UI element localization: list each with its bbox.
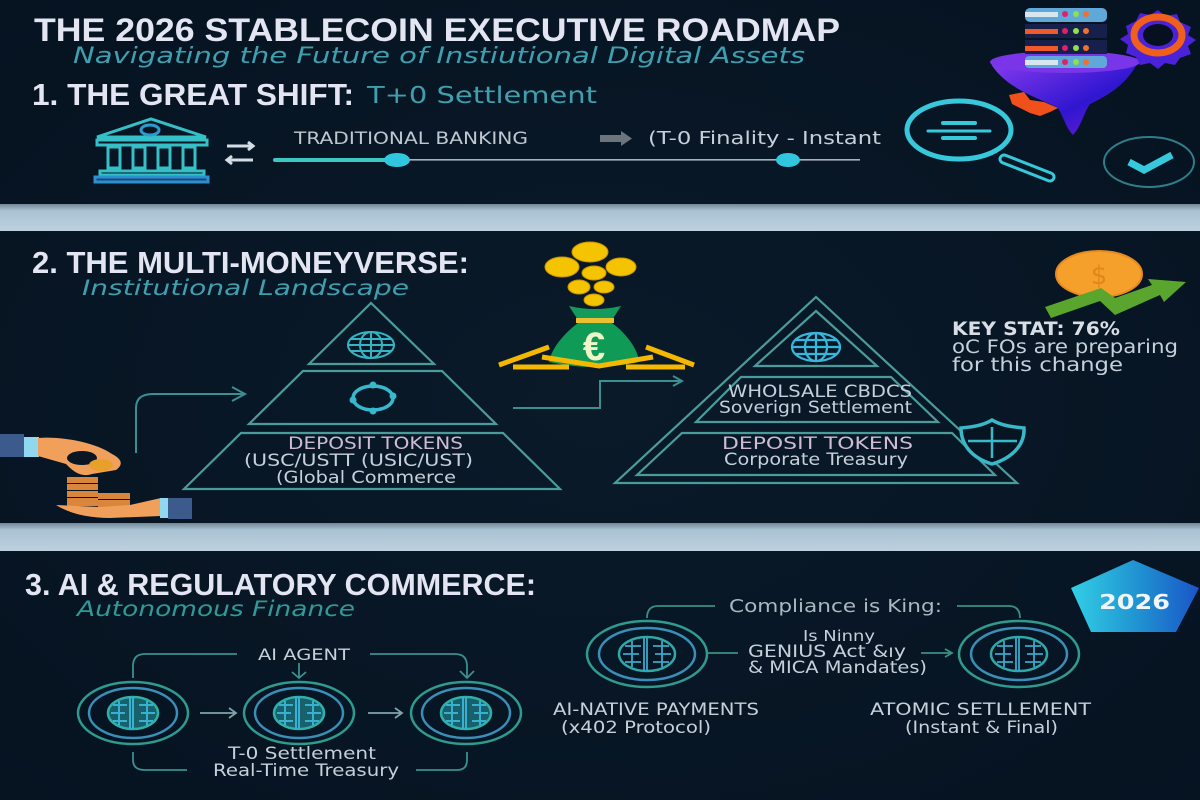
icon: euro money bag: € — [583, 325, 605, 369]
icon: bank — [95, 119, 208, 182]
icon: coin with growth arrow — [1045, 251, 1186, 318]
icon: coin with growth arrow: $ — [1091, 261, 1107, 291]
callout: key stat: oC FOs are preparing — [952, 337, 1178, 358]
text: mandates: & MICA Mandates) — [748, 658, 927, 677]
text: atomic settlement — [870, 700, 1092, 737]
panel: multi-moneyverse — [0, 242, 1186, 519]
icon: ring node — [350, 382, 396, 414]
callout: key stat — [952, 319, 1178, 376]
icon: magnifier — [907, 101, 1050, 177]
icon: check circle — [1104, 137, 1194, 187]
label: traditional banking: TRADITIONAL BANKING — [293, 129, 528, 149]
arrow: hand to pyramid — [136, 387, 245, 453]
pyramid: left — [184, 303, 560, 489]
subheading: institutional landscape: Institutional Landscape — [82, 276, 409, 301]
subheading: T+0 settlement: T+0 Settlement — [366, 81, 597, 109]
icon: hands with coins — [0, 434, 192, 519]
text: AI-native payments: (x402 Protocol) — [561, 718, 711, 737]
text: compliance is king: Compliance is King: — [729, 596, 942, 617]
panel: the great shift — [32, 8, 1196, 187]
text: real-time treasury: Real-Time Treasury — [213, 761, 399, 780]
connector: compliance — [647, 606, 1020, 657]
callout: key stat: KEY STAT: 76% — [952, 319, 1120, 340]
arrow: grey — [600, 131, 632, 146]
pyramid: right — [615, 297, 1017, 483]
panel: AI and regulatory commerce — [25, 560, 1199, 780]
heading: section 2: 2. THE MULTI-MONEYVERSE: — [32, 245, 469, 280]
icon: brain node 3 — [411, 682, 521, 744]
icon: brain node 1 — [78, 682, 188, 744]
icon: euro money bag — [499, 242, 694, 369]
text: AI-native payments: AI-NATIVE PAYMENTS — [553, 700, 759, 719]
heading: section 3: 3. AI & REGULATORY COMMERCE: — [25, 567, 536, 602]
progress timeline — [273, 153, 860, 167]
label: AI agent: AI AGENT — [258, 645, 350, 664]
icon: exchange arrows — [227, 142, 253, 164]
text: stablecoins: (USC/USTT (USIC/UST) — [244, 451, 473, 471]
icon: globe — [348, 332, 394, 358]
text: sovereign settlement: Soverign Settlement — [719, 398, 913, 417]
text: deposit tokens: DEPOSIT TOKENS — [288, 434, 463, 454]
text: mandates — [748, 627, 927, 677]
subheading: autonomous finance: Autonomous Finance — [75, 597, 355, 622]
text: atomic settlement: (Instant & Final) — [905, 718, 1058, 737]
connector: agent loop — [133, 654, 474, 770]
text: T-0 settlement: T-0 Settlement — [227, 744, 377, 763]
text: AI-native payments — [553, 700, 759, 737]
text: global commerce: (Global Commerce — [276, 468, 456, 488]
title: THE 2026 STABLECOIN EXECUTIVE ROADMAP — [34, 12, 840, 48]
text: wholesale cbdcs: WHOLSALE CBDCS — [728, 382, 912, 402]
text: deposit tokens: DEPOSIT TOKENS — [722, 434, 913, 454]
icon: data funnel — [990, 8, 1140, 135]
text: corporate treasury: Corporate Treasury — [724, 450, 908, 469]
arrows: between brain nodes — [200, 708, 402, 718]
callout: key stat: for this change — [952, 355, 1123, 376]
icon: globe — [792, 333, 840, 361]
icon: small orange gear — [1009, 92, 1058, 116]
text: mandates: Is Ninny — [803, 627, 875, 645]
heading: section 1: 1. THE GREAT SHIFT: — [32, 77, 354, 112]
subtitle: Navigating the Future of Instiutional Digital Assets — [73, 43, 805, 69]
text: atomic settlement: ATOMIC SETLLEMENT — [870, 700, 1092, 719]
icon: brain node 5 — [959, 621, 1079, 687]
badge: 2026 — [1071, 560, 1199, 632]
badge: 2026: 2026 — [1099, 590, 1170, 614]
label: finality: (T-0 Finality - Instant — [648, 129, 881, 149]
icon: purple gear — [1120, 10, 1196, 69]
icon: brain node 2 — [244, 682, 354, 744]
icon: shield — [961, 420, 1024, 464]
arrow: between pyramids — [513, 376, 682, 408]
icon: brain node 4 — [587, 621, 707, 687]
text: mandates: GENIUS Act &ıy — [748, 642, 906, 661]
